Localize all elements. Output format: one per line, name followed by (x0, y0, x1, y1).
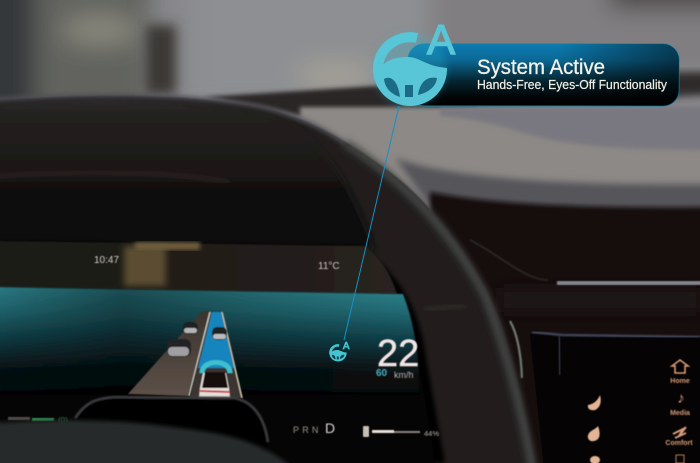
icon: seat heat lower (588, 426, 600, 441)
console edge highlight (510, 321, 522, 378)
active lane (190, 312, 243, 398)
range indicator: (0) (58, 416, 68, 425)
icon: home (672, 360, 688, 373)
adjacent vehicle far (183, 322, 198, 334)
hood body (0, 99, 375, 250)
lead vehicle (212, 327, 227, 340)
adjacent vehicle near (167, 339, 191, 357)
sensor arc (202, 362, 230, 373)
gear selector (293, 420, 335, 436)
icon: seat heat bottom (590, 456, 600, 463)
gear selector: D (325, 420, 335, 436)
battery gauge: 44% (424, 429, 439, 438)
road graphic (128, 311, 243, 398)
lower wheel hood bump (75, 397, 268, 463)
small system icon: A (343, 341, 350, 352)
home label: Home (670, 378, 690, 385)
adjacent lane (128, 311, 210, 396)
icon: hands-free steering wheel (373, 16, 455, 107)
gear selector: PRN (293, 425, 322, 435)
range indicator (8, 416, 68, 425)
icon: seat heat upper (588, 395, 601, 410)
small system icon (329, 341, 350, 361)
dark dash top band (205, 72, 700, 118)
callout panel (408, 44, 679, 106)
dashboard (300, 106, 700, 463)
time: 10:47 (94, 255, 119, 266)
comfort label: Comfort (665, 440, 693, 447)
icon: comfort (673, 427, 686, 438)
dashboard trim strip (557, 281, 700, 285)
battery gauge (363, 426, 439, 438)
icon: music note: ♪ (677, 390, 685, 407)
icon: seat (676, 455, 684, 463)
steering wheel rim and hood (0, 95, 538, 463)
steering wheel lower spoke (0, 420, 305, 463)
ego vehicle (199, 372, 230, 398)
temperature: 11°C (318, 261, 340, 272)
media label: Media (670, 410, 690, 417)
speed unit: km/h (394, 370, 414, 380)
speed: 22 (377, 333, 419, 375)
icon letter A: A (427, 16, 455, 63)
teal horizon band (0, 287, 420, 395)
center stack (530, 332, 700, 463)
clock strip (0, 241, 397, 294)
callout title: System Active (477, 56, 605, 79)
speed limit: 60 (376, 368, 388, 379)
icon wheel openings (384, 78, 437, 97)
lane line left (189, 312, 210, 396)
center stack touch icons (588, 360, 693, 463)
connector line (344, 106, 399, 340)
lane line right (222, 312, 242, 398)
instrument cluster screen (0, 241, 445, 463)
callout subtitle: Hands-Free, Eyes-Off Functionality (477, 78, 668, 92)
rim seam (425, 305, 465, 310)
